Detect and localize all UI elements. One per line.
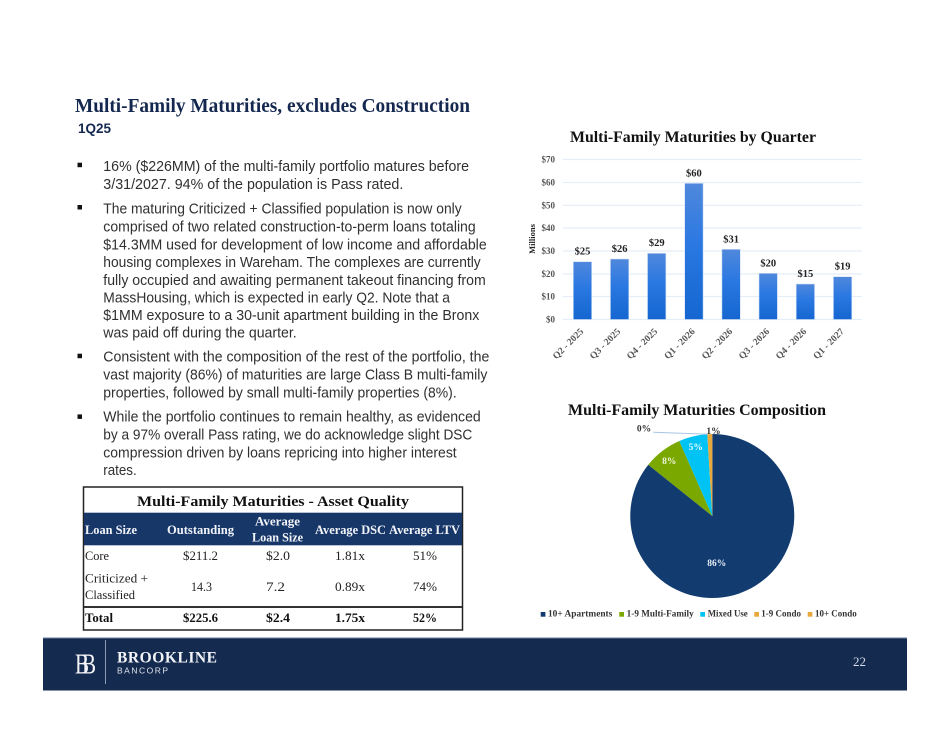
row: total: $2.4 xyxy=(266,611,291,625)
data labels: $19 xyxy=(835,262,850,272)
bullet 2 xyxy=(78,201,487,342)
bullet 2: The maturing Criticized + Classified population is now only xyxy=(103,201,462,217)
logo wordmark: BROOKLINE xyxy=(117,649,217,666)
y axis labels: $40 xyxy=(542,223,556,233)
pie labels: 0% xyxy=(637,425,651,435)
table header row: Loan Size xyxy=(85,523,137,537)
bullet 2: $1MM exposure to a 30-unit apartment building in the Bronx xyxy=(103,308,480,324)
slice: 10+ condo xyxy=(707,434,712,516)
row: core: $211.2 xyxy=(183,549,218,563)
row: criticized + classified: 74% xyxy=(413,580,437,594)
slice: 10+ apartments xyxy=(630,434,794,598)
bullet 4: While the portfolio continues to remain healthy, as evidenced xyxy=(103,410,481,426)
legend xyxy=(541,609,857,619)
data labels: $15 xyxy=(798,269,813,280)
slice: 1-9 multi-family xyxy=(648,441,712,516)
x axis labels: Q2 - 2025 xyxy=(551,327,586,362)
icon: brookline BB monogram: B xyxy=(82,648,96,680)
row: criticized + classified xyxy=(85,572,437,602)
row: total: 1.75x xyxy=(335,611,366,625)
row: core: Core xyxy=(85,549,109,563)
row: core xyxy=(85,549,437,563)
row: criticized + classified: Classified xyxy=(85,588,136,602)
legend: 10+ Apartments xyxy=(548,609,613,619)
pie labels: 5% xyxy=(689,443,703,453)
x axis labels: Q2 - 2026 xyxy=(700,327,735,362)
pie labels xyxy=(637,425,726,569)
text block: commentary bullets xyxy=(78,159,489,479)
leader line xyxy=(653,432,708,434)
data labels: $26 xyxy=(612,244,627,255)
pie labels: 86% xyxy=(707,559,726,569)
row: criticized + classified: Criticized + xyxy=(85,572,148,586)
x axis labels: Q3 - 2026 xyxy=(737,327,772,362)
x axis labels: Q1 - 2026 xyxy=(663,327,698,362)
table header row: Average LTV xyxy=(389,523,460,537)
bullet 2: housing complexes in Wareham. The complexes are currently xyxy=(103,255,481,271)
legend: 1-9 Multi-Family xyxy=(627,609,694,619)
chart title: Multi-Family Maturities by Quarter xyxy=(570,129,816,146)
row: criticized + classified: 0.89x xyxy=(335,580,366,594)
row: core: $2.0 xyxy=(266,549,290,563)
bars xyxy=(573,183,852,320)
data labels xyxy=(575,168,850,280)
table title: Multi-Family Maturities - Asset Quality xyxy=(137,494,410,510)
pie labels: 1% xyxy=(706,427,721,437)
bullet 2: comprised of two related construction-to-perm loans totaling xyxy=(103,219,476,235)
table header row: Loan Size xyxy=(252,531,303,545)
row: total: Total xyxy=(85,611,114,625)
row: total xyxy=(85,611,437,625)
bullet 2: fully occupied and awaiting permanent takeout financing from xyxy=(103,273,486,289)
bullet 3: Consistent with the composition of the rest of the portfolio, the xyxy=(103,350,489,366)
row: core: 51% xyxy=(413,549,437,563)
y axis labels: $70 xyxy=(542,154,556,164)
footer band xyxy=(43,638,907,690)
bullet 4: by a 97% overall Pass rating, we do acknowledge slight DSC xyxy=(103,428,472,444)
pie labels: 8% xyxy=(662,457,676,467)
slice: mixed use xyxy=(679,434,712,516)
bullet 3: properties, followed by small multi-family properties (8%). xyxy=(103,385,457,401)
row: criticized + classified: 7.2 xyxy=(266,580,285,594)
x axis labels: Q1 - 2027 xyxy=(812,327,847,362)
y axis labels: $60 xyxy=(542,178,556,188)
x axis labels: Q4 - 2025 xyxy=(625,327,660,362)
y axis labels: $50 xyxy=(542,200,556,210)
bullet 4: rates. xyxy=(103,463,137,479)
bar chart: maturities by quarter xyxy=(527,129,862,362)
y axis labels: $20 xyxy=(542,269,556,279)
data labels: $29 xyxy=(649,238,665,249)
table header row: Average xyxy=(255,515,300,529)
bullet 2: was paid off during the quarter. xyxy=(102,326,297,342)
x axis labels: Q3 - 2025 xyxy=(588,327,623,362)
x axis labels xyxy=(551,327,847,362)
bullet 4 xyxy=(78,410,481,479)
bullet 2: $14.3MM used for development of low income and affordable xyxy=(103,237,487,253)
subtitle: 1Q25: 1Q25 xyxy=(78,120,111,136)
table header row: Outstanding xyxy=(167,523,235,537)
title: Multi-Family Maturities, excludes Construction xyxy=(75,95,470,117)
logo subtext: BANCORP xyxy=(117,666,168,676)
table header row xyxy=(84,513,462,545)
table header row: Average DSC xyxy=(315,523,386,537)
page number: 22 xyxy=(853,654,866,669)
y axis labels xyxy=(542,154,556,324)
y axis labels: $0 xyxy=(546,314,556,324)
row: core: 1.81x xyxy=(335,549,366,563)
row: total: $225.6 xyxy=(183,611,218,625)
data labels: $31 xyxy=(723,234,739,246)
legend: 1-9 Condo xyxy=(761,609,801,619)
bullet 2: MassHousing, which is expected in early Q2. Note that a xyxy=(103,291,450,307)
row: total: 52% xyxy=(413,611,437,625)
data labels: $60 xyxy=(686,168,702,180)
row: criticized + classified: 14.3 xyxy=(191,580,212,594)
bullet 1: 16% ($226MM) of the multi-family portfolio matures before xyxy=(103,159,469,175)
x axis labels: Q4 - 2026 xyxy=(774,327,809,362)
bullet 1 xyxy=(78,159,469,193)
pie chart: maturities composition xyxy=(541,402,857,619)
y axis labels: $30 xyxy=(542,246,556,256)
bullet 3 xyxy=(78,350,489,401)
panel: asset quality table xyxy=(84,487,462,630)
data labels: $25 xyxy=(575,246,590,258)
y axis title: Millions xyxy=(527,223,537,254)
data labels: $20 xyxy=(760,258,776,270)
y axis labels: $10 xyxy=(542,292,556,302)
legend: 10+ Condo xyxy=(815,609,857,619)
bullet 1: 3/31/2027. 94% of the population is Pass rated. xyxy=(103,177,403,193)
legend: Mixed Use xyxy=(708,609,748,619)
bullet 3: vast majority (86%) of maturities are large Class B multi-family xyxy=(103,367,488,383)
bullet 4: compression driven by loans repricing into higher interest xyxy=(103,445,457,461)
chart title: Multi-Family Maturities Composition xyxy=(568,402,826,419)
icon: brookline BB monogram: B xyxy=(75,648,89,680)
